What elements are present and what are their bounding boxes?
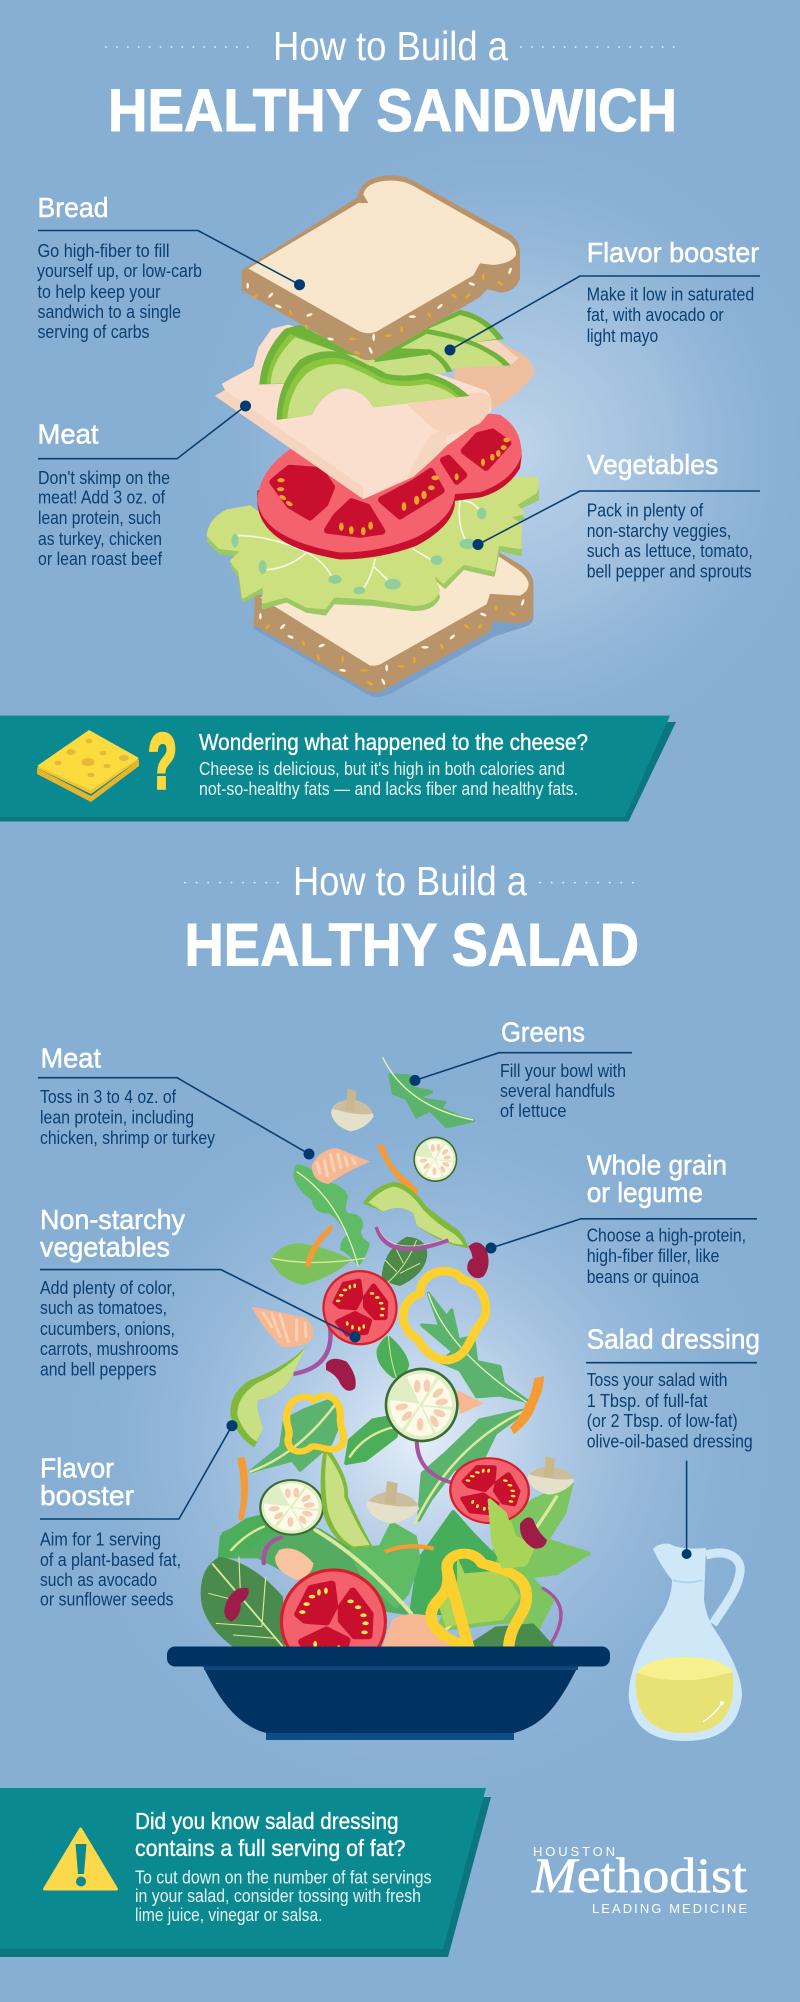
callout: non-starchy vegetables: Add plenty of color, xyxy=(40,1278,176,1298)
lettuce overlay xyxy=(490,1500,532,1567)
callout: salad dressing xyxy=(586,1324,760,1559)
callout: bread: yourself up, or low-carb xyxy=(37,261,202,281)
callout: vegetables: such as lettuce, tomato, xyxy=(587,541,753,561)
callout: vegetables: Pack in plenty of xyxy=(587,500,704,520)
bowl xyxy=(167,1646,610,1740)
callout: whole grain: or legume xyxy=(587,1177,703,1208)
callout: whole grain xyxy=(486,1150,757,1287)
pepper top xyxy=(403,1271,486,1360)
callout: non-starchy vegetables: cucumbers, onions, xyxy=(40,1319,175,1339)
cucumber small xyxy=(413,1137,457,1182)
mushroom top xyxy=(331,1089,374,1131)
callout: salad meat: Toss in 3 to 4 oz. of xyxy=(40,1087,177,1107)
banner: dressing fat: in your salad, consider tossing with fresh xyxy=(135,1886,421,1906)
callout: greens: Fill your bowl with xyxy=(500,1061,626,1081)
tomato right xyxy=(442,1451,537,1531)
carrot right xyxy=(511,1400,537,1434)
avocado big xyxy=(230,1346,307,1447)
icon: cheese slices xyxy=(37,730,139,802)
dark leaf xyxy=(382,1237,427,1286)
callout: salad meat: lean protein, including xyxy=(40,1108,194,1128)
callout: salad meat: Meat xyxy=(40,1042,101,1073)
pepper small xyxy=(287,1396,344,1451)
salad illustration: lower layer xyxy=(201,1396,589,1675)
callout: greens: of lettuce xyxy=(500,1101,566,1121)
banner: cheese: Cheese is delicious, but it's high in both calories and xyxy=(199,759,565,779)
banner: dressing fat xyxy=(0,1788,491,1957)
callout: flavor booster: Flavor booster xyxy=(587,237,759,268)
callout: salad flavor booster: Flavor xyxy=(40,1453,114,1484)
rocket leaf top xyxy=(383,1057,473,1127)
chicken middle xyxy=(252,1307,313,1347)
mushroom right xyxy=(527,1456,574,1495)
callout: bread: sandwich to a single xyxy=(38,302,181,322)
bean top xyxy=(467,1242,489,1278)
callout: whole grain: beans or quinoa xyxy=(587,1267,700,1287)
callout: non-starchy vegetables: and bell peppers xyxy=(40,1360,156,1380)
callout: flavor booster: light mayo xyxy=(587,326,658,346)
leaf middle xyxy=(377,1335,409,1378)
callout: salad dressing: 1 Tbsp. of full-fat xyxy=(587,1391,708,1411)
icon: warning triangle xyxy=(44,1829,116,1889)
bean right xyxy=(520,1517,547,1549)
callout: bread: serving of carbs xyxy=(38,322,150,342)
callout: flavor booster: fat, with avocado or xyxy=(587,305,724,325)
logo: Houston Methodist: HOUSTON xyxy=(533,1844,615,1859)
bottom bread xyxy=(253,551,533,697)
callout: salad meat: chicken, shrimp or turkey xyxy=(40,1128,215,1148)
carrot middle xyxy=(384,1544,434,1553)
callout: non-starchy vegetables xyxy=(40,1204,360,1380)
onions behind xyxy=(264,1443,561,1647)
banner: cheese xyxy=(0,716,676,822)
salad heading xyxy=(184,858,639,979)
oil jug xyxy=(628,1544,742,1741)
callout: vegetables: Vegetables xyxy=(587,449,718,480)
carrot top xyxy=(377,1144,418,1197)
cucumber left xyxy=(259,1479,324,1536)
callout: greens: several handfuls xyxy=(500,1081,615,1101)
rocket inside pepper xyxy=(422,1293,528,1403)
callout: flavor booster xyxy=(444,237,760,356)
banner: dressing fat: lime juice, vinegar or salsa. xyxy=(135,1905,322,1925)
banner: cheese: Wondering what happened to the cheese? xyxy=(199,729,588,755)
spinach leaf xyxy=(201,1557,285,1648)
turkey slices xyxy=(215,325,534,499)
lettuce and rocket xyxy=(220,1400,589,1630)
callout: meat: Don't skimp on the xyxy=(38,468,170,488)
callout: salad dressing: olive-oil-based dressing xyxy=(587,1432,753,1452)
tomato big xyxy=(280,1568,387,1675)
callout: non-starchy vegetables: carrots, mushrooms xyxy=(40,1339,178,1359)
lettuce inside large pepper xyxy=(438,1557,520,1627)
callout: greens: Greens xyxy=(501,1016,585,1048)
callout: flavor booster: Make it low in saturated xyxy=(587,285,754,305)
callout: whole grain: high-fiber filler, like xyxy=(587,1246,719,1266)
callout: vegetables xyxy=(472,449,760,582)
pepper large xyxy=(431,1554,526,1647)
sandwich heading: How to Build a xyxy=(273,23,508,69)
kidney bean xyxy=(224,1588,249,1622)
logo: Houston Methodist: LEADING MEDICINE xyxy=(592,1901,747,1916)
avocado slices xyxy=(259,310,511,420)
salad heading: How to Build a xyxy=(293,858,527,904)
spinach leaf left xyxy=(270,1243,365,1285)
banner: cheese: not-so-healthy fats — and lacks fiber and healthy fats. xyxy=(199,779,578,799)
carrot right xyxy=(510,1376,544,1434)
banner: dressing fat: Did you know salad dressing xyxy=(135,1808,398,1834)
top bread xyxy=(242,175,520,360)
callout: salad meat xyxy=(38,1042,314,1160)
callout: vegetables: non-starchy veggies, xyxy=(587,521,731,541)
callout: salad dressing: (or 2 Tbsp. of low-fat) xyxy=(587,1411,738,1431)
callout: meat xyxy=(38,400,251,569)
icon: question mark: ? xyxy=(148,717,177,805)
dressing xyxy=(636,1657,733,1733)
callout: meat: lean protein, such xyxy=(38,508,161,528)
callout: non-starchy vegetables: vegetables xyxy=(40,1232,170,1263)
callout: salad flavor booster: of a plant-based fat, xyxy=(40,1550,181,1570)
callout: whole grain: Whole grain xyxy=(587,1150,727,1181)
callout: greens xyxy=(410,1016,632,1121)
logo: Houston Methodist: Methodist xyxy=(531,1847,747,1903)
rocket big xyxy=(293,1165,370,1267)
salad heading: HEALTHY SALAD xyxy=(184,912,639,979)
callout: bread xyxy=(37,192,305,342)
carrot left xyxy=(305,1224,333,1267)
onion middle xyxy=(293,1327,331,1374)
avocado top xyxy=(363,1182,468,1248)
callout: meat: or lean roast beef xyxy=(38,549,163,569)
callout: meat: as turkey, chicken xyxy=(38,529,162,549)
callout: salad flavor booster xyxy=(40,1420,238,1610)
cucumber large xyxy=(385,1368,459,1442)
carrot left xyxy=(237,1457,248,1522)
callout: non-starchy vegetables: Non-starchy xyxy=(40,1204,185,1235)
sandwich illustration xyxy=(208,175,537,697)
callout: bread: Bread xyxy=(38,192,108,223)
avocado slice xyxy=(321,1443,373,1549)
callout: bread: to help keep your xyxy=(38,282,161,302)
callout: salad flavor booster: or sunflower seeds xyxy=(40,1590,174,1610)
callout: salad flavor booster: booster xyxy=(40,1480,134,1511)
salad illustration: upper layer xyxy=(230,1057,544,1447)
dark spinach at bowl xyxy=(465,1623,555,1647)
callout: salad flavor booster: Aim for 1 serving xyxy=(40,1529,161,1549)
mushroom left xyxy=(366,1481,419,1524)
banner: dressing fat: To cut down on the number of fat servings xyxy=(135,1868,432,1888)
callout: vegetables: bell pepper and sprouts xyxy=(587,562,752,582)
chicken behind cucumber xyxy=(457,1390,484,1414)
callout: salad dressing: Toss your salad with xyxy=(587,1370,728,1390)
callout: bread: Go high-fiber to fill xyxy=(38,241,170,261)
sandwich heading: HEALTHY SANDWICH xyxy=(108,77,677,144)
bean middle xyxy=(326,1359,356,1391)
chicken top xyxy=(312,1148,370,1184)
callout: whole grain: Choose a high-protein, xyxy=(587,1226,746,1246)
sandwich heading xyxy=(106,23,677,144)
callout: salad dressing: Salad dressing xyxy=(587,1324,760,1355)
onion top xyxy=(377,1227,448,1249)
callout: salad flavor booster: such as avocado xyxy=(40,1570,157,1590)
lettuce xyxy=(208,479,537,614)
callout: non-starchy vegetables: such as tomatoes, xyxy=(40,1298,167,1318)
tomato slices xyxy=(257,414,522,559)
callout: meat: Meat xyxy=(38,418,99,450)
chicken pieces xyxy=(275,1548,314,1580)
callout: meat: meat! Add 3 oz. of xyxy=(38,488,166,508)
tomato top xyxy=(322,1270,398,1345)
banner: dressing fat: contains a full serving of fat? xyxy=(135,1835,406,1861)
